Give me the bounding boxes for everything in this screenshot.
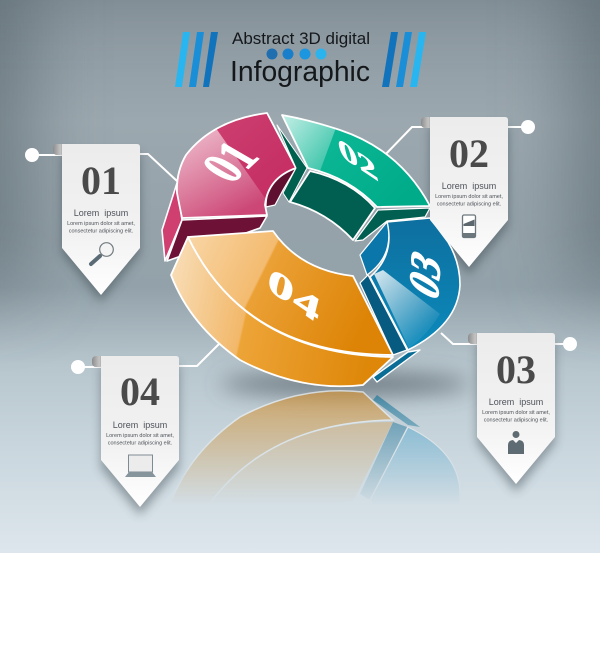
segment 03 blue (360, 218, 460, 382)
panel 01: Lorem ipsum (74, 208, 128, 218)
panel 04: 04 (120, 369, 160, 414)
segment 02 green (277, 110, 430, 241)
3D ring (162, 110, 460, 386)
panel 03: consectetur adipiscing elit. (484, 418, 549, 424)
panel 01: 01 (81, 158, 121, 203)
panel 03: Lorem ipsum (489, 397, 543, 407)
icon: magnifier (91, 243, 113, 264)
panel 04 (92, 356, 179, 515)
panel 02 sheet over ring: consectetur adipiscing elit. (437, 202, 502, 208)
panel 03: 03 (496, 347, 536, 392)
connector 04 (71, 342, 221, 374)
number 01 on ring: 01 (190, 133, 272, 191)
panel 04: Lorem ipsum (113, 420, 167, 430)
panel 01 (53, 144, 140, 302)
title line 2: Infographic (230, 55, 370, 87)
connector 03 (441, 333, 577, 351)
connector 02 (383, 120, 535, 157)
panel 02 sheet over ring: Lorem ipsum dolor sit amet, (435, 194, 503, 200)
panel 02 shadow and curl (421, 117, 508, 275)
panel 02 sheet over ring: 02 (449, 131, 489, 176)
icon: phone (462, 215, 476, 238)
panel 02 sheet over ring: Lorem ipsum (442, 181, 496, 191)
panel 04: Lorem ipsum dolor sit amet, (106, 433, 174, 439)
number 03 on ring: 03 (400, 241, 450, 309)
panel 01: Lorem ipsum dolor sit amet, (67, 221, 135, 227)
panel 02 sheet over ring (430, 117, 508, 267)
panel 03: Lorem ipsum dolor sit amet, (482, 410, 550, 416)
ring floor shadow (220, 373, 470, 395)
left stripes (175, 32, 218, 87)
title block (175, 29, 426, 87)
segment 04 orange (171, 231, 393, 386)
ring reflection (174, 390, 459, 498)
number 04 on ring: 04 (264, 260, 325, 331)
right stripes (382, 32, 426, 87)
connector 01 (25, 148, 177, 181)
panel 01: consectetur adipiscing elit. (69, 228, 134, 234)
icon: laptop (125, 455, 156, 477)
icon: person (508, 431, 524, 454)
panel 03 (468, 333, 555, 492)
number 02 on ring: 02 (334, 131, 381, 189)
title line 1: Abstract 3D digital (232, 29, 370, 48)
segment 01 red (162, 113, 296, 261)
panel 04: consectetur adipiscing elit. (108, 440, 173, 446)
title dots (266, 48, 326, 60)
